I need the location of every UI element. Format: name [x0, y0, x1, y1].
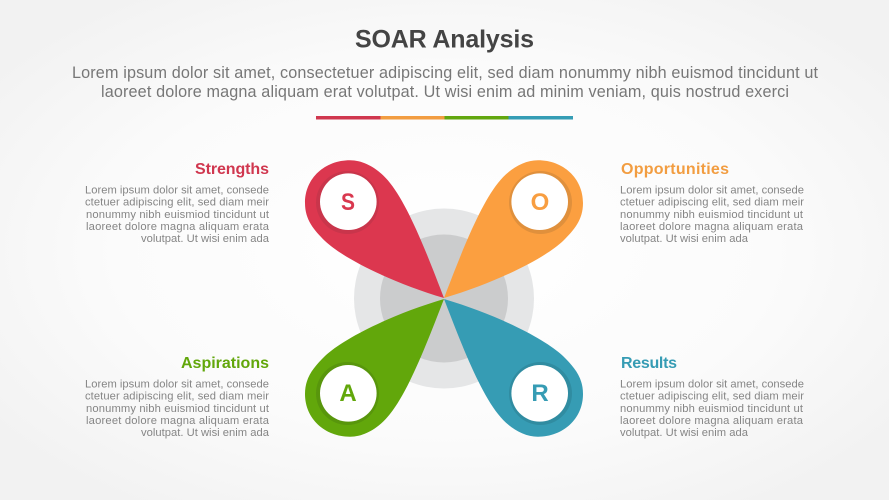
text block: Results: nonummy nibh euismiod tincidunt ut	[620, 403, 804, 415]
text block: Aspirations: laoreet dolore magna aliquam erata	[86, 415, 270, 427]
petal: A	[305, 299, 444, 437]
text block: Aspirations: Lorem ipsum dolor sit amet, consede	[85, 378, 269, 390]
title: SOAR Analysis	[355, 26, 534, 54]
petal: A: A	[339, 380, 357, 407]
colour divider bar	[316, 116, 573, 120]
subtitle: Lorem ipsum dolor sit amet, consectetuer adipiscing elit, sed diam nonummy nibh euismod tincidunt ut	[72, 64, 818, 82]
text block: Aspirations: nonummy nibh euismiod tincidunt ut	[86, 403, 270, 415]
text block: Opportunities: Opportunities	[621, 161, 729, 178]
text block: Aspirations	[85, 355, 270, 439]
subtitle: laoreet dolore magna aliquam erat volutpat. Ut wisi enim ad minim veniam, quis nostrud exerci	[101, 83, 789, 101]
text block: Opportunities: laoreet dolore magna aliquam erata	[620, 221, 804, 233]
text block: Aspirations: ctetuer adipiscing elit, sed diam meir	[85, 390, 269, 402]
text block: Opportunities: Lorem ipsum dolor sit amet, consede	[620, 184, 804, 196]
text block: Strengths: Strengths	[195, 161, 269, 178]
concentric background circles	[354, 208, 534, 388]
text block: Strengths: laoreet dolore magna aliquam erata	[86, 221, 270, 233]
text block: Opportunities	[620, 161, 804, 245]
petal: O: O	[531, 189, 549, 216]
petal: S	[305, 160, 444, 298]
text block: Results: Lorem ipsum dolor sit amet, consede	[620, 378, 804, 390]
text block: Results: volutpat. Ut wisi enim ada	[620, 427, 749, 439]
text block: Aspirations: volutpat. Ut wisi enim ada	[141, 427, 270, 439]
petal: S: S	[341, 189, 355, 216]
text block: Strengths: nonummy nibh euismiod tincidunt ut	[86, 209, 270, 221]
text block: Results: ctetuer adipiscing elit, sed diam meir	[620, 390, 804, 402]
subtitle	[72, 64, 818, 101]
text block: Strengths: volutpat. Ut wisi enim ada	[141, 233, 270, 245]
text block: Results: Results	[621, 355, 677, 372]
text block: Opportunities: volutpat. Ut wisi enim ada	[620, 233, 749, 245]
text block: Results	[620, 355, 804, 439]
text block: Strengths: Lorem ipsum dolor sit amet, consede	[85, 184, 269, 196]
petal: R: R	[531, 380, 549, 407]
petal: O	[444, 160, 583, 298]
text block: Aspirations: Aspirations	[181, 355, 269, 372]
text block: Strengths: ctetuer adipiscing elit, sed diam meir	[85, 196, 269, 208]
text block: Opportunities: ctetuer adipiscing elit, sed diam meir	[620, 196, 804, 208]
petal: R	[444, 299, 583, 437]
text block: Opportunities: nonummy nibh euismiod tincidunt ut	[620, 209, 804, 221]
text block: Results: laoreet dolore magna aliquam erata	[620, 415, 804, 427]
text block: Strengths	[85, 161, 270, 245]
